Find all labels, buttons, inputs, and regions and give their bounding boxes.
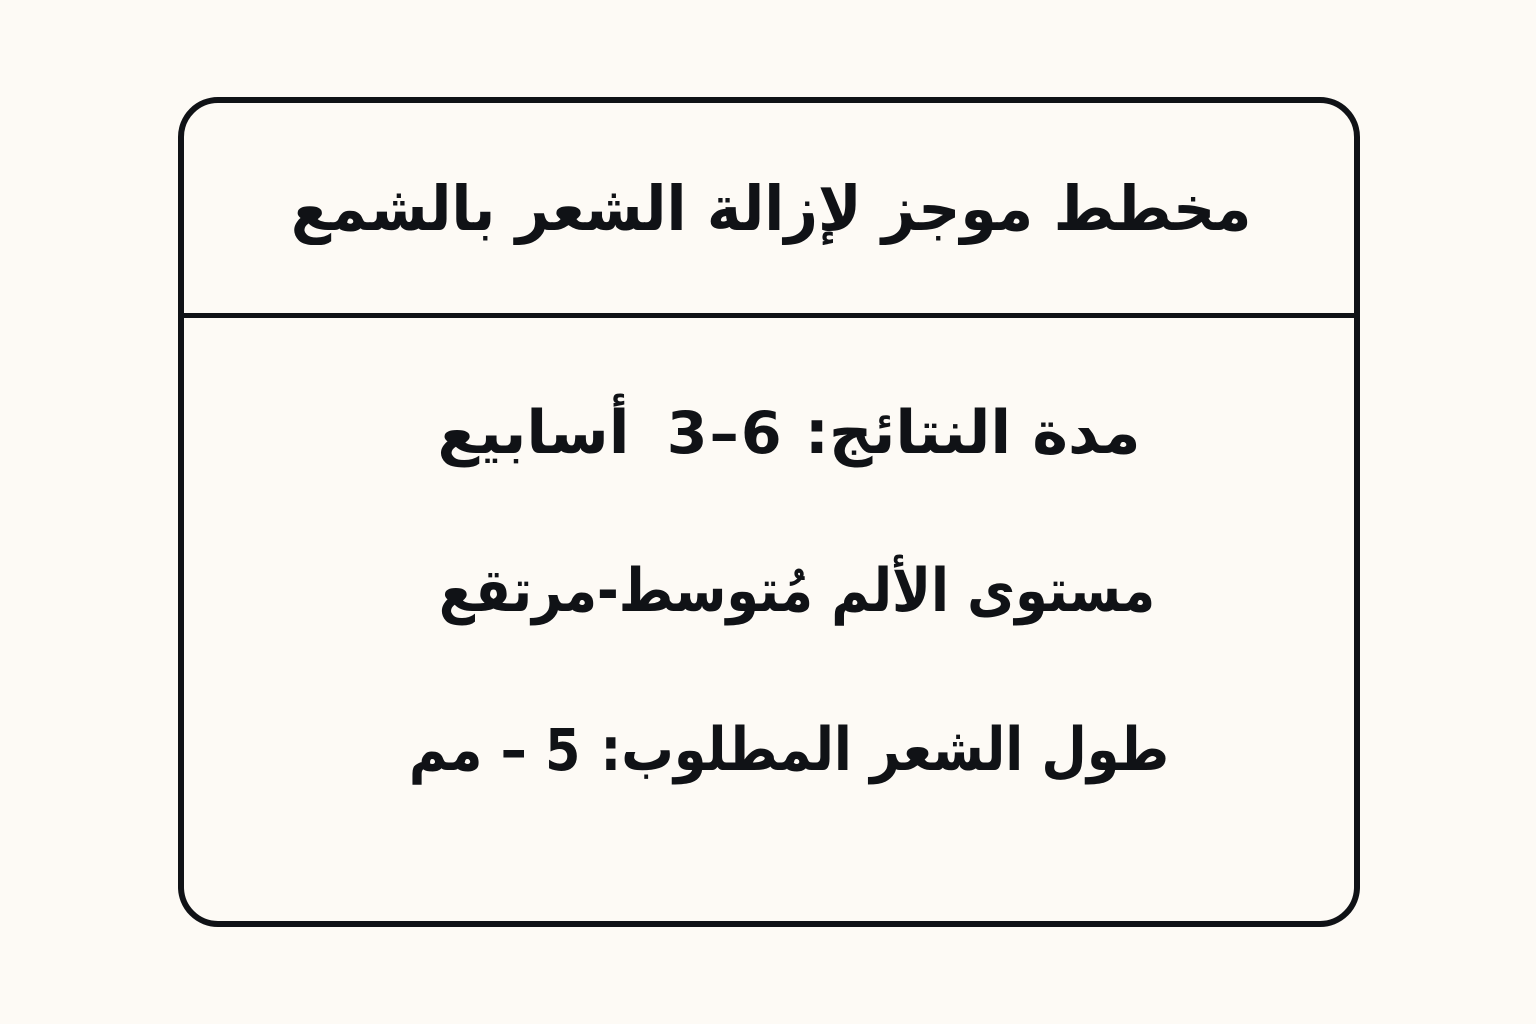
text row: results duration: مدة النتائج: أسابيع [437, 398, 1141, 468]
title: مخطط موجز لإزالة الشعر بالشمع [291, 172, 1252, 245]
panel: summary card [178, 97, 1360, 927]
heading divider [182, 313, 1354, 318]
text row: pain level: مستوى الألم مُتوسط-مرتقع [438, 556, 1155, 626]
text row: required hair length: طول الشعر المطلوب: – مم [409, 715, 1169, 785]
text row: results duration: 3–6 [667, 399, 784, 467]
text row: required hair length: 5 [545, 716, 582, 784]
